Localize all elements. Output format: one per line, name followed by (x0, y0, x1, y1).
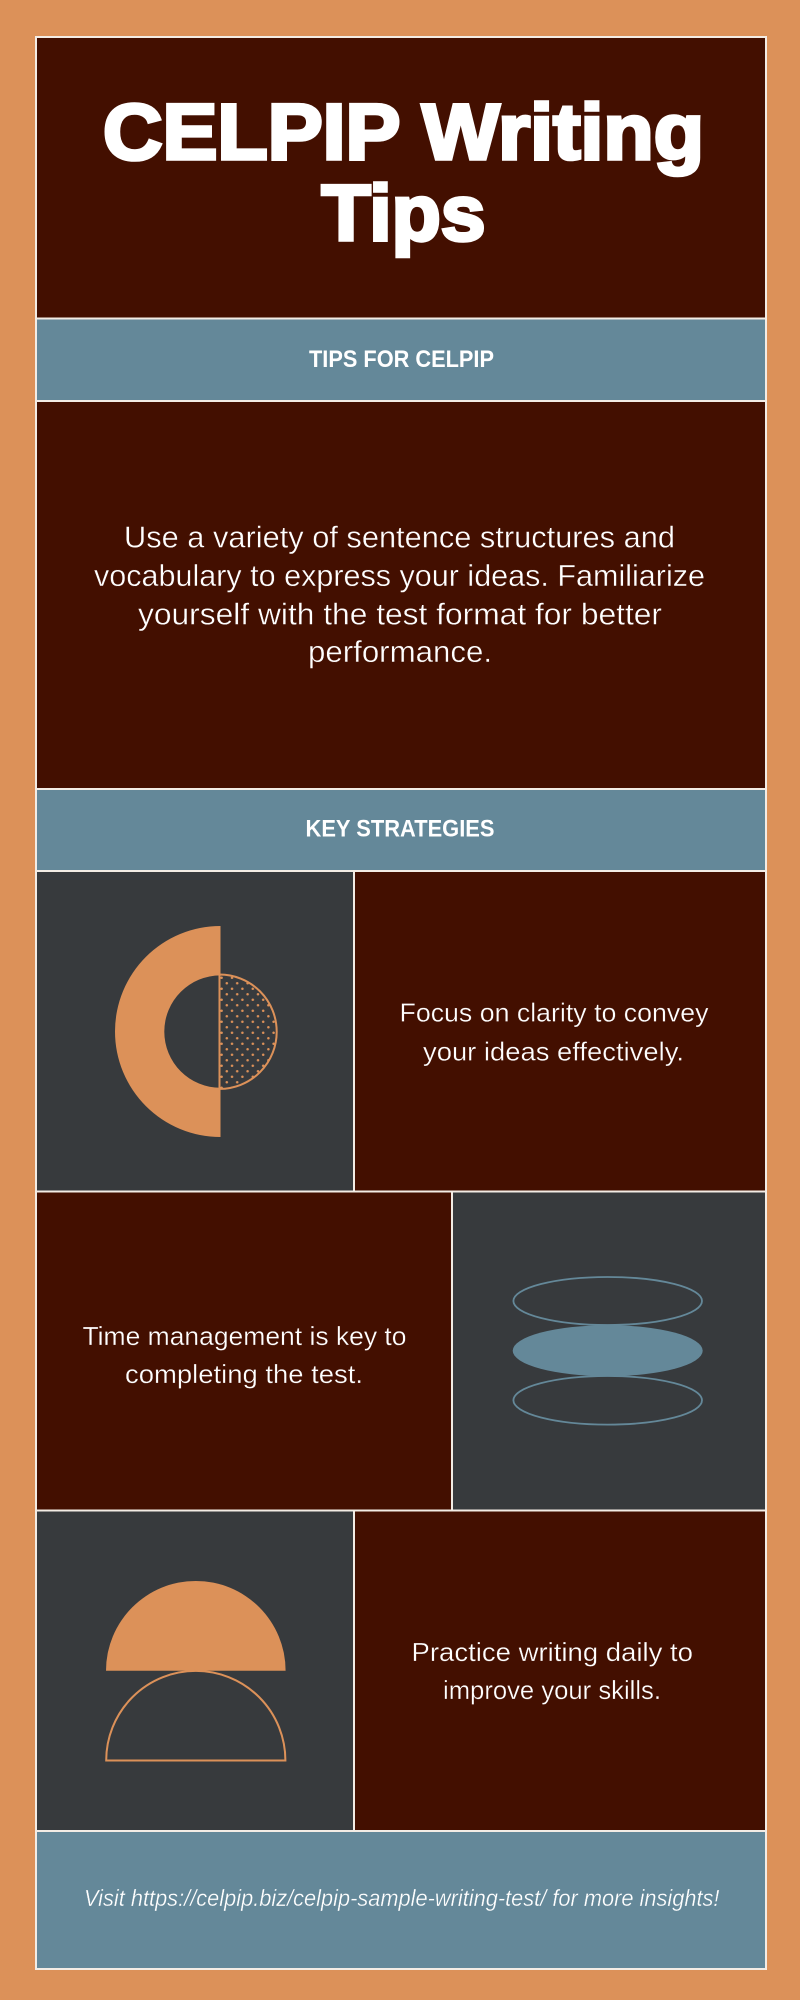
text block: tips paragraph: vocabulary to express your ideas. Familiarize (94, 558, 705, 593)
text block: daily practice tip (412, 1637, 693, 1705)
title: CELPIP Writing (103, 87, 704, 176)
text block: time management tip: Time management is key to (82, 1321, 406, 1351)
title: Tips (322, 168, 486, 257)
panel: strategy 1 text (354, 871, 766, 1192)
text block: clarity tip: Focus on clarity to convey (400, 998, 708, 1028)
icon: half ring with dotted half circle (115, 926, 277, 1137)
text block: time management tip: completing the test. (125, 1359, 363, 1389)
text block: daily practice tip: improve your skills. (443, 1675, 661, 1705)
title (103, 87, 704, 257)
panel: tips for celpip band (36, 318, 766, 401)
text block: time management tip (82, 1321, 406, 1389)
icon: stacked half circles (106, 1581, 286, 1760)
text block: tips paragraph: yourself with the test format for better (138, 596, 662, 631)
panel: strategy 3 icon (36, 1510, 354, 1831)
panel: strategy 2 icon (452, 1192, 766, 1510)
heading: key strategies: KEY STRATEGIES (306, 816, 494, 843)
panel: key strategies band (36, 789, 766, 871)
panel: strategy 2 text (36, 1192, 452, 1510)
panel: footer (36, 1831, 766, 1969)
text block: footer link: Visit https://celpip.biz/celpip-sample-writing-test/ for more insights! (84, 1885, 720, 1911)
text block: tips paragraph: performance. (308, 634, 492, 669)
text block: clarity tip (400, 998, 708, 1067)
text block: tips paragraph (94, 520, 705, 669)
text block: clarity tip: your ideas effectively. (423, 1037, 684, 1067)
heading: tips for celpip: TIPS FOR CELPIP (309, 346, 494, 373)
panel: title (36, 37, 766, 318)
text block: tips paragraph: Use a variety of sentence structures and (124, 520, 675, 555)
text block: daily practice tip: Practice writing daily to (412, 1637, 693, 1667)
panel: strategy 1 icon (36, 871, 354, 1192)
panel: tips paragraph (36, 401, 766, 789)
panel: strategy 3 text (354, 1510, 766, 1831)
icon: stacked ellipses (513, 1277, 703, 1425)
